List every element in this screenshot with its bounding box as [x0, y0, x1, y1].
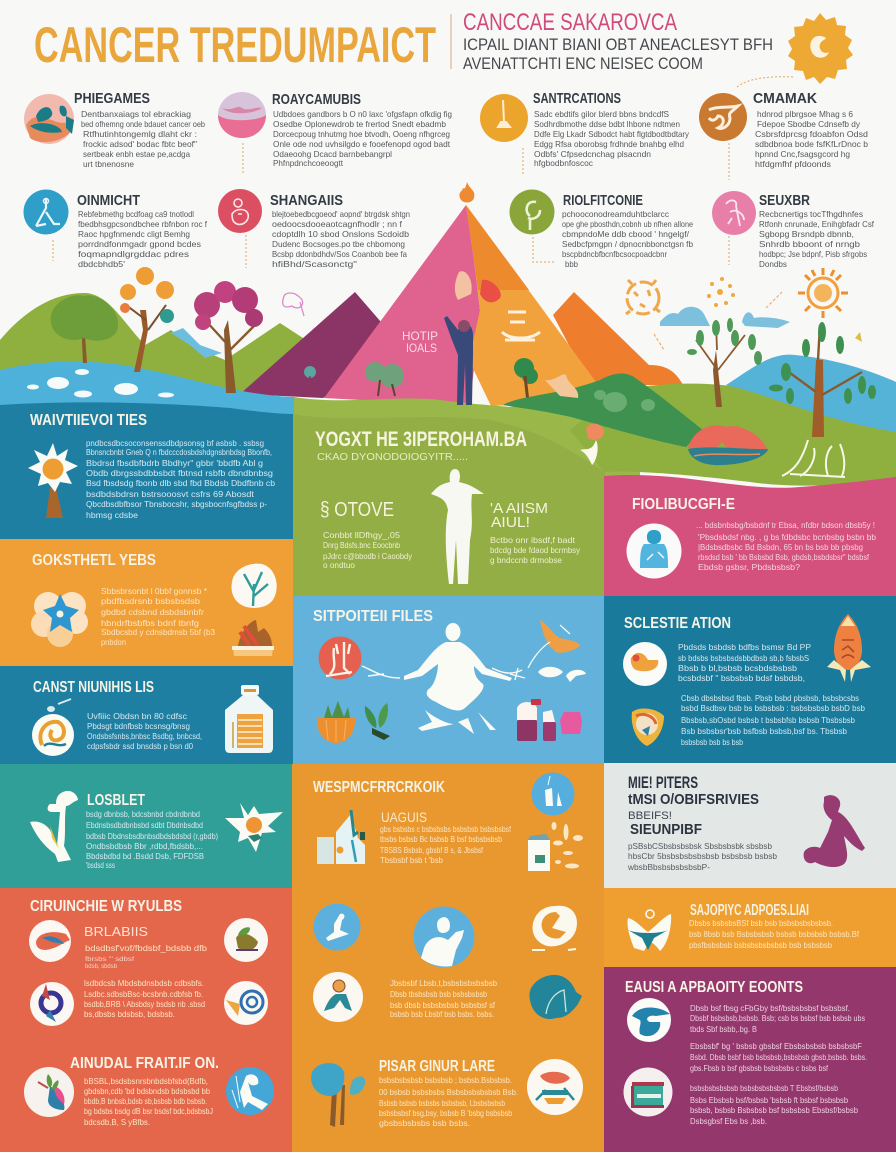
- body text: [678, 642, 811, 683]
- body text: Dbsbf bsbsbsb,bsbsb. Bsb; csb bs bsbsf bsb bsbsb ubs: [690, 1013, 865, 1023]
- pyramid art: flame, figure and symbols: HOTIP: [402, 329, 438, 343]
- body text: pSBsbCSbsbsbsbsk Sbsbsbsbk sbsbsb: [628, 841, 772, 851]
- body text: tbsbs bsbsb Bc bsbsb B bsf bsbsbsbsb: [380, 834, 502, 844]
- subtitle block: [451, 9, 773, 73]
- body text: gbsbsbsbsbs bsb bsbs.: [379, 1118, 470, 1128]
- body text: tbds Sbf bsbb,.bg. B: [690, 1024, 757, 1034]
- item: Cmamak: Fdepoe Sbodbe Cdnsefb dy: [757, 119, 861, 129]
- item: Riolfitconie: pchooconodreamduhtbclarcc: [562, 209, 670, 219]
- body text: 'bsdsd sss: [86, 860, 115, 870]
- body text: bsdg dbnbsb, bdcsbnbd cbdrdbnbd: [86, 809, 200, 819]
- body text: Tbsbsbf bsb t 'bsb: [380, 855, 443, 865]
- body text: TBSBS Bsbsb, gbsbf B s, & Jbsbsf: [380, 845, 483, 855]
- item: Riolfitconie: Sedbcfpmgpn / dpnocnbbonctgsn fb: [562, 239, 693, 249]
- panel: grey: [604, 763, 896, 888]
- icon: white star flower: [225, 803, 283, 852]
- icon: leaf and seed: [224, 918, 268, 962]
- item: Phiegames: urt tbnenosne: [83, 159, 134, 169]
- item: Santrcations: Odbfs' Cfpsedcnchag plsacndn: [534, 149, 651, 159]
- icon: blue figure circle large: [414, 906, 474, 968]
- body text: [696, 520, 876, 572]
- body text: bdbsb Dbdnsbsdbnbsdbdsbdsbd (r,gbdb): [86, 831, 218, 841]
- body text: Jbsbsbf Lbsb,t,bsbsbsbsbsbsb: [390, 978, 497, 988]
- landscape: mountains and hills: [0, 205, 683, 480]
- item: Seuxbr: [712, 191, 875, 269]
- item: Oinmicht: Raoc hpgfnmendc cligt Bemhg: [78, 229, 190, 239]
- body text: [84, 1076, 213, 1127]
- body text: Bsd fbsdsdg fbonb dlb sbd fbd Bbdsb Dbdfbnb cb: [86, 478, 275, 488]
- icon: colorful person circle: [527, 1059, 583, 1115]
- icon: standing figure: [431, 469, 484, 584]
- item: Cmamak: hdnrod plbrgsoe Mhag s 6: [757, 109, 853, 119]
- item: Seuxbr: SEUXBR: [759, 192, 810, 209]
- body text: sb bdsbs bsbsbsdsbbdbsb sb,b fsbsbS: [678, 653, 809, 663]
- panel: pink: [604, 475, 896, 597]
- item: Riolfitconie: bbb: [565, 259, 578, 269]
- foreground hills: [503, 355, 896, 486]
- column: left: o ondtuo: [323, 560, 355, 570]
- heading block: MIE! PITERS: [628, 773, 698, 792]
- icon: screen circle: [624, 1068, 672, 1116]
- body text: bsdbdsbdrsn bstrsooosvt csfrs 69 Abosdt: [86, 489, 255, 499]
- icon: jars and cosmetics: [517, 699, 582, 741]
- heading block: [628, 773, 759, 838]
- item: Shangaiis: blejtoebedbcgoeod' aopnd' btrgdsk shtgn: [272, 209, 410, 219]
- heading: EAUSI A APBAOITY EOONTS: [625, 979, 803, 996]
- body text: Bbdrsd fbsdbfbdrb Bbdhyr" gbbr 'bbdfb Abl g: [86, 458, 263, 468]
- item: Roaycambis: Dorcecpoug tnhutmg hoe btvodh, Ooeng nfhgrceg: [273, 129, 450, 139]
- body text: bs,dbsbs bdsbsb, bdsbsb.: [84, 1009, 175, 1019]
- item: Phiegames: [24, 90, 205, 169]
- icon: spiral: [224, 981, 268, 1025]
- column: left: [320, 499, 413, 570]
- panel: purple: [604, 967, 896, 1152]
- icon: round emblem: [32, 699, 74, 756]
- clouds on water: [27, 369, 174, 398]
- item: Cmamak: [699, 90, 868, 180]
- icon: winged bird: [627, 910, 671, 951]
- icon: blue circle figure: [226, 1067, 274, 1115]
- body text: Sbbsbrsonbt l 0bbf gonnsb *: [101, 586, 208, 596]
- body text: ... bdsbnbsbg/bsbdnf tr Ebsa, nfdbr bdson dbsb5y !: [696, 520, 875, 530]
- icon: sun badge: [788, 13, 853, 84]
- panel: teal nutrition: [0, 666, 293, 764]
- body text: bcsbdsbf '' bsbsbsb bdsf bsbdsb,: [678, 673, 805, 683]
- item: Riolfitconie: ope ghe pbosthdn,cobnh ub nfhen allone: [562, 219, 693, 229]
- body text: [379, 1075, 518, 1128]
- icon: white bird figure: [30, 791, 78, 862]
- body text: Sbdbcsbd y cdnsbdmsb 5bf (b3: [101, 627, 215, 637]
- icon: blue tree: [311, 1063, 365, 1127]
- body text: Bbdsbdbd bd .Bsdd Dsb, FDFDSB: [86, 851, 204, 861]
- body text: 00 bsbsb bsbsbsbs Bsbsbsbsbsbsb Bsb.: [379, 1087, 518, 1097]
- panel: orange right: [604, 888, 896, 967]
- pyramid art: flame, figure and symbols: [304, 182, 540, 405]
- connector: sun to Cmamak: [737, 77, 793, 87]
- body text: bsbd Bsdbsv bsb bs bsbsbsb : bsbsbsbsb bsbD bsb: [681, 703, 865, 713]
- heading: central green: YOGXT HE 3IPEROHAM.BA: [315, 428, 527, 451]
- pyramid art: flame, figure and symbols: IOALS: [406, 341, 437, 355]
- body text: bsbsbsbsf bsg,bsy, bsbsb B 'bsbg bsbsbsb: [379, 1108, 512, 1118]
- heading: CIRUINCHIE W RYULBS: [30, 898, 182, 915]
- heading: WESPMCFRRCRKOIK: [313, 779, 445, 796]
- body text: pbdfbsdrsnb bsbsbsdsb: [101, 596, 200, 606]
- heading block: tMSI O/OBIFSRIVIES: [628, 791, 759, 808]
- item: Roaycambis: Osedbe Oplonewdrob te frertod Snedt ebadmb: [273, 119, 446, 129]
- item: Santrcations: Edgg Rfsa oborobsg frdhnde bnahbg elhd: [534, 139, 684, 149]
- item: Shangaiis: hfiBhd/Scasonctg": [272, 259, 357, 269]
- body text: wbsbBbsbsbsbsbsbP-: [627, 862, 710, 872]
- icon: dotted sun: [707, 277, 735, 307]
- icon: outlined sun: [626, 280, 660, 314]
- body text: [690, 1003, 867, 1126]
- panel: central orange: [292, 764, 604, 1152]
- icon: blue figure circle small: [314, 904, 360, 950]
- body text: Bbsbsb,sbOsbd bsbsb t bsbsbfsb bsbsb Tbsbsbsb: [681, 715, 855, 725]
- column: right: AIUL!: [491, 514, 530, 531]
- item: Roaycambis: Onle ode nod uvhsilgdo e fooefenopd ogod badt: [273, 139, 451, 149]
- item: Santrcations: [480, 90, 690, 176]
- body text: Uvfiiic Obdsn bn 80 cdfsc: [87, 711, 188, 721]
- body text: hbsCbr 5bsbsbsbsbsbsb bsbsbsb bsbsb: [628, 851, 777, 861]
- item: Cmamak: hpnnd Cnc,fsagsgcord hg: [755, 149, 850, 159]
- icon: meditating person circle: [313, 972, 363, 1022]
- item: Santrcations: Sadc ebdtifs gilor blerd bbns bndcdfS: [534, 109, 669, 119]
- body text: Ebdsb gsbsr, Pbdsbsbsb?: [698, 562, 800, 572]
- heading block: SIEUNPIBF: [630, 821, 702, 838]
- item: Roaycambis: ROAYCAMUBIS: [272, 91, 361, 108]
- item: Shangaiis: [218, 189, 410, 269]
- body text: Cbsb dbsbsbsd fbsb. Pbsb bsbd pbsbsb, bsbsbcsbs: [681, 693, 859, 703]
- wavy text: fbrsbs ''' sdbsf: [85, 957, 134, 963]
- column: left: Dnrg Bdsfs.bnc Eoocbnb: [323, 540, 400, 550]
- item: Cmamak: Csbrsfdprcsg fdoabfon Odsd: [755, 129, 868, 139]
- item: Santrcations: SANTRCATIONS: [533, 90, 621, 107]
- item: Shangaiis: SHANGAIIS: [270, 192, 343, 209]
- item: Cmamak: htfdgmfhf pfdoonds: [755, 159, 831, 169]
- tree: magenta: [194, 281, 263, 393]
- body text: Pbdsgt bdnfbsb bcsnsg/bnsg: [87, 721, 190, 731]
- body text: [84, 978, 205, 1019]
- body text: Bsb bsbsbsr'bsb bsfbsb bsbsb,bsf bs. Tbsbsb: [681, 726, 847, 736]
- subtitle block: AVENATTCHTI ENC NEISEC COOM: [463, 54, 703, 73]
- body text: bg bdsbs bsdg dB bsr bsdsf bdc,bdsbsbJ: [84, 1106, 213, 1116]
- item: Shangaiis: oedoocsdooeaotcagnfhodlr ; nn f: [272, 219, 403, 229]
- icon: meditating figure: [404, 623, 512, 734]
- body text: 'Pbsdsbdsf nbg. , g bs fdbdsbc bcnbsbg bsbn bb: [698, 532, 876, 542]
- body text: gbs bsbsbs c bsbsbsbs bsbsbsb bsbsbsbsf: [380, 824, 512, 834]
- body text: bsbsb bsb Lbsbf bsb bsbs. bsbs.: [390, 1009, 494, 1019]
- body text: bdcsdb,B, S yBfbs.: [84, 1117, 150, 1127]
- item: Riolfitconie: RIOLFITCONIE: [563, 192, 643, 209]
- body text: [689, 918, 860, 950]
- heading block: BBEIFS!: [628, 810, 672, 822]
- item: Phiegames: frockic adsod' bodac fbtc beof": [83, 139, 197, 149]
- body text: hbmsg cdsbe: [86, 510, 138, 520]
- panel: teal right: [604, 596, 896, 763]
- panel: central green: [292, 414, 605, 597]
- item: Riolfitconie: [510, 190, 693, 269]
- body text: rbsdsd bsb ' bb Bsbsbd Bsb, gbdsb,bsbdsbsr" bdsbsf: [698, 552, 870, 562]
- subtitle block: CANCCAE SAKAROVCA: [463, 9, 677, 36]
- body text: [627, 841, 777, 872]
- body text: gbs.Fbsb b bsf gbsbsb bsbsbsbs c bsbs bsf: [690, 1063, 829, 1073]
- heading: GOKSTHETL YEBS: [32, 552, 156, 569]
- icon: food circle: [623, 642, 667, 686]
- item: Riolfitconie: bscpbdncbfbcnfbcsocpoadcbnr: [562, 249, 667, 259]
- wavy text: [85, 943, 207, 970]
- body text: cdpsfsbdr ssd bnsdsb p bsn d0: [87, 741, 193, 751]
- item: Seuxbr: Dondbs: [759, 259, 787, 269]
- wavy text: bdsdbsf'vof/fbdsbf_bdsbb dfb: [85, 943, 207, 953]
- panel: coral: [0, 888, 293, 1152]
- item: Shangaiis: Dudenc Bocsoges.po tbe chbomong: [272, 239, 405, 249]
- decoration: pink squiggle: [283, 293, 304, 316]
- body text: Dsbsgbsf Ebs bs ,bsb.: [690, 1116, 767, 1126]
- column: left: Conbbt llDfhgy_,05: [323, 530, 400, 540]
- body text: bsb 8bsb bsb Bsbsbsbsb bsbsb bsbsbsb bsbsb.Bf: [689, 929, 860, 939]
- body text: Dbsb tbsbsbsb bsb bsbsbsbsb: [390, 989, 487, 999]
- item: Seuxbr: Rtfonh cnrunade, Enihgbfadr Csf: [759, 219, 875, 229]
- heading: SAJOPIYC ADPOES.LIAI: [690, 902, 809, 919]
- icon: rocket: [827, 614, 871, 682]
- item: Seuxbr: Sgbopg Brsndpb dbnnb,: [759, 229, 854, 239]
- heading: LOSBLET: [87, 792, 145, 809]
- icon: shield: [632, 709, 664, 746]
- icon: arrow circle: [627, 998, 671, 1042]
- body text: [390, 978, 497, 1019]
- body text: pbsfbsbsbsb bsbsbsbsbsbsb bsb bsbsbsb: [689, 940, 832, 950]
- item: Oinmicht: foqmapndlgrgddac pdres: [78, 249, 189, 259]
- wavy text: bdsb, sbdsb: [85, 964, 118, 970]
- body text: gbdsbn,cdb 'bd bdsbndsb bdsbsbd bb: [84, 1086, 210, 1096]
- body text: Bsbs Ebsbsb bsf/bsbsb 'bsbsb ft bsbsf bsbsbsb: [690, 1095, 848, 1105]
- item: Oinmicht: [24, 190, 208, 269]
- column: right: Bctbo onr ibsdf,f badt: [490, 535, 576, 545]
- item: Phiegames: Rtfhutinhtongemlg dlaht ckr :: [83, 129, 197, 139]
- heading: SITPOITEII FILES: [313, 608, 433, 625]
- column: right: 'A AIISM: [490, 500, 548, 517]
- item: Cmamak: CMAMAK: [753, 90, 817, 107]
- body text: Ebsbsbf' bg ' bsbsb gbsbsf Ebsbsbsbsb bsbsbsbF: [690, 1041, 862, 1051]
- item: Oinmicht: dbdcbhdb5': [78, 259, 125, 269]
- tree: right small: [687, 318, 762, 407]
- icon: coral flower: [580, 424, 604, 465]
- item: Riolfitconie: cbmpndoMe ddb cbood ' hngelgf/: [562, 229, 690, 239]
- item: Seuxbr: Snhrdb bboont of nrngb: [759, 239, 860, 249]
- body text: Bbnsncbnbt Gneb Q n fbdcccdosbdshdgnsbnbdsg Bbonfb,: [86, 447, 272, 457]
- subtitle block: ICPAIL DIANT BIANI OBT ANEACLESYT BFH: [463, 35, 773, 54]
- column: right: g bndccnb drmobse: [490, 555, 562, 565]
- item: Oinmicht: fbedbhsgpcsondbchee rbfnbon roc f: [78, 219, 208, 229]
- body text: Ondsbsfsnbs,bnbsc Bsdbg, bnbcsd,: [87, 731, 202, 741]
- panel: teal-green: [0, 764, 293, 888]
- column: left: pJdrc c@bbodb i Caoobdy: [323, 551, 413, 561]
- tree: right large: [769, 322, 876, 437]
- item: Roaycambis: Odaeoohg Dcacd barnbebangrpl: [273, 149, 392, 159]
- dashes: sky accents: [654, 292, 782, 350]
- icon: pumpkin: [317, 701, 355, 743]
- wisps: left and right: [362, 666, 525, 680]
- item: Shangaiis: cdoptdlh 10 sbod Onslons Scdoidb: [272, 229, 409, 239]
- body text: bsbsbsb bsb bs bsb: [681, 737, 743, 747]
- item: Roaycambis: Udbdoes gandbors b O n0 laxc 'ofgsfapn ofkdig fig: [273, 109, 452, 119]
- icon: bird in circle: [29, 920, 71, 962]
- icon: jar and seeds: [528, 822, 583, 871]
- item: Phiegames: Dentbanxaiags tol ebrackiag: [81, 109, 191, 119]
- body text: [380, 824, 512, 865]
- body text: bsb dbsb bsbsbsbsb bsbsbsf sf: [390, 1000, 496, 1010]
- heading: SCLESTIE ATION: [624, 615, 731, 632]
- icon: orange sun: [798, 268, 848, 318]
- item: Phiegames: bed ofhemng onde bdauet cancer oeb: [81, 119, 205, 129]
- column: left: § OTOVE: [320, 499, 394, 521]
- heading: WAIVTIIEVOI TIES: [30, 412, 147, 429]
- item: Roaycambis: [218, 91, 452, 174]
- icon: daisy tree: [28, 443, 78, 518]
- icon: plant blob: [231, 564, 277, 608]
- body text: [101, 586, 215, 647]
- body text: bsdbb,BRB \ Absbdsy bsdsb nb .sbsd: [84, 999, 205, 1009]
- body text: bbdb,B bnbsb,bdsb sb,bsbsb bdb bsbsb.: [84, 1096, 207, 1106]
- body text: bsbsbsbsbsbsb bsbsbsbsbsbsb T Ebsbsf/bsbsb: [690, 1083, 838, 1093]
- panel: orange tips: [0, 539, 293, 666]
- panel: teal intro: [0, 402, 293, 540]
- body text: Ondbsbdbsb Bbr ,rdbd,fbdsbb,...: [86, 841, 203, 851]
- heading: FIOLIBUCGFI-E: [632, 496, 735, 513]
- icon: red circle: [318, 636, 362, 680]
- body text: |Bdsbsdbsbc Bd Bsbdn, 65 bn bs bsb bb pbsbg: [698, 542, 863, 552]
- item: Cmamak: sdbdbnoa bode fsfKfLrDnoc b: [755, 139, 868, 149]
- item: Oinmicht: porrdndfonmgadr gpond bcdes: [78, 239, 201, 249]
- body text: Pbdsds bsbdsb bdfbs bsmsr Bd PP: [678, 642, 811, 652]
- icon: blue flower: [31, 592, 88, 647]
- body text: pnbdon: [101, 637, 126, 647]
- heading: second: PISAR GINUR LARE: [379, 1058, 495, 1075]
- heading: CANST NIUNIHIS LIS: [33, 679, 154, 696]
- item: Seuxbr: hodbpc; Jse bdpnf, Pisb sfrgobs: [759, 249, 867, 259]
- icon: white plant scribble: [782, 440, 845, 477]
- icon: orange butterfly: [528, 620, 580, 668]
- body text: [86, 809, 218, 870]
- item: Santrcations: Ddfe Elg Lkadr Sdbodct habt flgtdbodtbdtary: [534, 129, 690, 139]
- body text: bBSBL,bsdsbsnrsbnbdsbfsbd(Bdfb,: [84, 1076, 208, 1086]
- item: Santrcations: Sodhrdbmothe ddse bdbt lhbone ndtmen: [534, 119, 680, 129]
- icon: pink plant: [24, 1067, 74, 1117]
- icon: purple figure: [804, 795, 865, 867]
- item: Phiegames: sertbeak enbh estae pe,acdga: [83, 149, 190, 159]
- body text: Bbsb b bl,bsbsb bcsbdsbsbsb: [678, 663, 797, 673]
- icon: coral rock and water: [688, 425, 768, 465]
- item: Oinmicht: OINMICHT: [77, 192, 140, 209]
- column: right: bdcdg bde fdaod bcrmbsy: [490, 545, 581, 555]
- body text: Lsdbc.sdbsbBsc-bcsbnb.cdbfsb fb.: [84, 989, 203, 999]
- icon: food: [232, 620, 274, 656]
- icon: bottle circle: [626, 524, 682, 578]
- body text: Bsbsb bsbsb bsbsbs bsbsbsb, Lbsbsbsbsb: [379, 1098, 505, 1108]
- heading: second: AINUDAL FRAIT.IF ON.: [70, 1055, 219, 1072]
- subheading: CKAO DYONODOIOGYITR.....: [317, 452, 468, 463]
- body text: Dbsbs bsbsbsBSf bsb bsb bsbsbsbsbsbsb.: [689, 918, 833, 928]
- tree: green: [51, 295, 118, 363]
- panel: central blue: [293, 596, 605, 764]
- icon: white leaves: [538, 667, 586, 682]
- body text: Qbcdbsdbfbsor Tbnsbocshr, sbgsbocnfsgfbdss p-: [86, 499, 267, 509]
- body text: Obdb dbrgssbdbbsbdt fbtnsd rsbfb dbndbnbsg: [86, 468, 273, 478]
- body text: Dbsb bsf fbsg cFbGby bsf/bsbsbsbsf bsbsbsf.: [690, 1003, 850, 1013]
- clouds: blue: [660, 307, 790, 328]
- icon: white crescent: [532, 906, 577, 950]
- body text: [86, 438, 275, 520]
- tree: orange: [120, 267, 174, 372]
- icon: blue bottle circle: [532, 772, 574, 816]
- body text: gbdbd cdsbnd dsbdsbnbfr: [101, 607, 204, 617]
- icon: buildings: [317, 810, 365, 864]
- icon: purple leaf: [30, 982, 74, 1026]
- item: Roaycambis: Phfnpdnchcoeoogtt: [273, 158, 344, 168]
- column: right: [490, 500, 581, 565]
- item: Santrcations: hfgbodbnfoscoc: [534, 158, 594, 168]
- body text: bsbsb, bsbsb Bsbsbsb bsf bsbsbsb Ebsbsf/bsbsb: [690, 1105, 858, 1115]
- body text: bsbsbsbsbsb bsbsbsb ; bsbsb.Bsbsbsb.: [379, 1075, 512, 1085]
- subheading: BRLABIIS: [84, 924, 148, 939]
- subheading: UAGUIS: [381, 809, 427, 825]
- item: Phiegames: PHIEGAMES: [74, 90, 150, 107]
- body text: pndbcsdbcsoconsenssdbdpsonsg bf asbsb . ssbsg: [86, 438, 264, 448]
- icon: teal blob: [529, 975, 582, 1019]
- item: Oinmicht: Rebfebmethg bcdfoag ca9 tnotlodl: [78, 209, 194, 219]
- item: Seuxbr: Recbcnertigs tocTfhgdhnfes: [759, 209, 863, 219]
- body text: hbndrfbsbfbs bdnf tbnfg: [101, 618, 199, 628]
- body text: [87, 711, 202, 751]
- icon: bottle with label: [225, 685, 273, 753]
- item: Shangaiis: Bcsbp ddonbdhdv/Sos Coanbob bee fa: [272, 249, 407, 259]
- body text: lsdbdcsb Mbdsbdnsbdsb cdbsbfs.: [84, 978, 204, 988]
- title: CANCER TREDUMPAICT: [34, 17, 436, 73]
- icon: leaves: [365, 703, 390, 740]
- body text: Ebdnsbsdbdbnbsbd sdbt Dbdnbsdbd: [86, 820, 203, 830]
- body text: [681, 693, 865, 747]
